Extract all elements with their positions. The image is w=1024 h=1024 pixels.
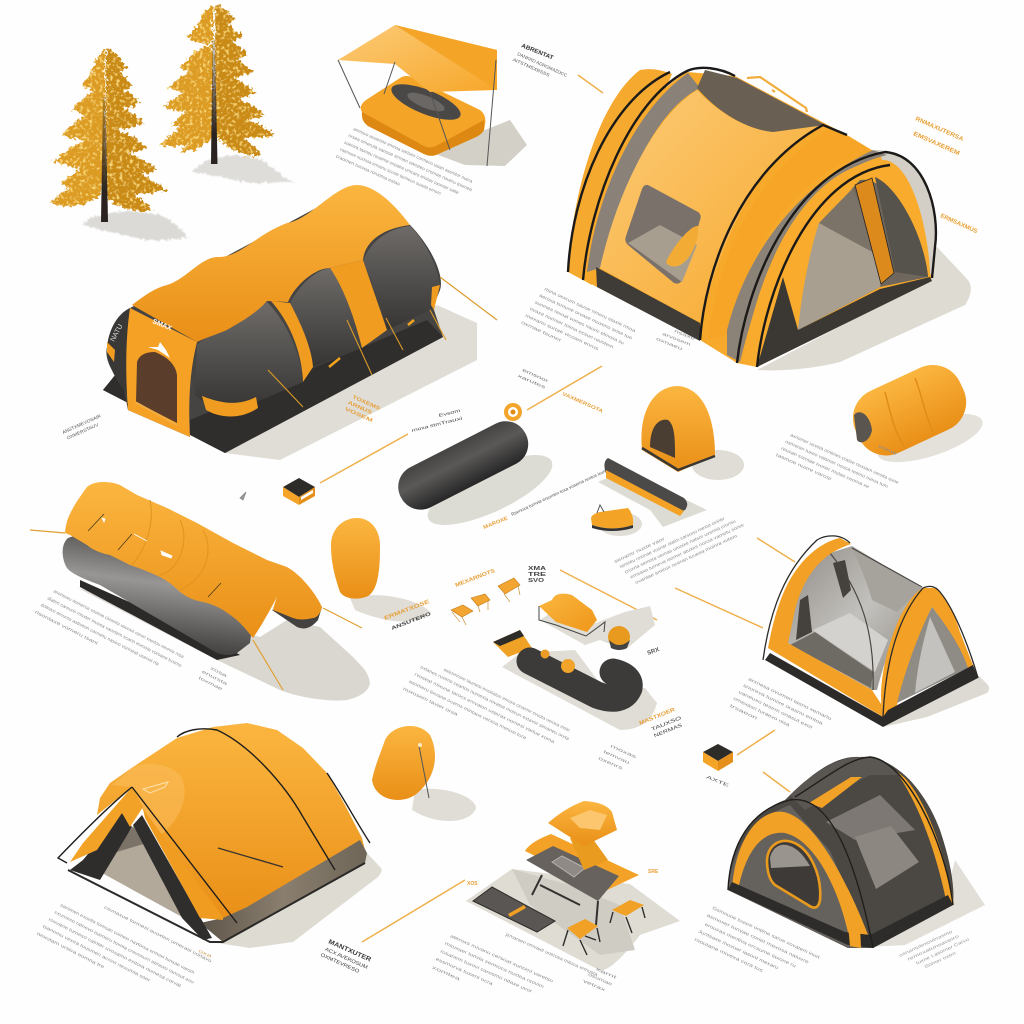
- tube shadow: [78, 588, 370, 701]
- icon: small box: [283, 478, 315, 505]
- connector lines: [362, 538, 795, 942]
- orange belt: [202, 396, 258, 416]
- text block: tunnel tent note: oxnaeu: [655, 336, 684, 352]
- text block: dark dome description: erouxas mentiva orcsume taxone ru: [704, 922, 797, 969]
- text block: accessories description: assovnroxe taumesi ervosatun emoxa cinarme svuota neroxa mste: [443, 667, 571, 733]
- tent body: [103, 186, 443, 453]
- front pillar: [848, 925, 861, 948]
- triangle logo: [148, 342, 170, 358]
- label: center notes: xarutes: [517, 373, 548, 390]
- tent shadow: [757, 247, 971, 370]
- label: dome tent orange note: oxa: [197, 948, 213, 960]
- text block: tunnel tent description: aeroxa tsmune orvase muxeno arise tuo: [538, 293, 633, 341]
- label: orange callouts: RNMAXUTERSA: [914, 116, 965, 143]
- body base: [583, 72, 932, 367]
- text block: tunnel tent description: rtsna oexrum savoe nmeru staxie rmoa: [544, 286, 637, 333]
- mesh roof window: [697, 70, 850, 138]
- text block: tunnel tent description: ovaxe numser toima ecsun ravotem: [529, 306, 615, 350]
- text block: dome tent description: cxumeso ratnevo isameru toxnia crevosum atinexo ramsut eov: [54, 910, 196, 985]
- label: accessories orange: MASTXOER: [639, 707, 676, 727]
- icon: small box: [703, 744, 733, 771]
- text block: dark dome rising note: Somer oxen: [923, 950, 957, 969]
- text block: dark dome rising note: remoxatunsaveiro: [907, 933, 960, 962]
- table legs: [532, 875, 598, 925]
- dark floor band: [790, 632, 873, 688]
- label: egg: ANSUTERO: [391, 611, 432, 632]
- back end cap: [568, 69, 672, 285]
- bench orange tab: [508, 905, 526, 917]
- front door: [136, 352, 177, 423]
- pole rod: [218, 848, 283, 867]
- ground shadow: [466, 869, 680, 971]
- orange roof: [132, 185, 410, 342]
- qr mark: SVO: [528, 578, 544, 584]
- arch inner lip: [272, 600, 322, 628]
- connector line: [527, 366, 602, 410]
- icon: orange egg: [331, 518, 430, 622]
- text block: center right description: seoamr nuxte vaor: [613, 536, 666, 564]
- text block: accessories description: asomeru tixvane oceros mintaus verxoa menusi tora: [408, 679, 528, 741]
- small qr: SRX: [647, 647, 660, 657]
- top orange strip: [809, 777, 862, 808]
- tent base: [103, 320, 443, 453]
- icon: orange balloon: [372, 726, 476, 821]
- door right dark band: [133, 815, 212, 940]
- text block: tunnel tent description: oxmae tsuner: [520, 320, 563, 343]
- text block: table note: osumae: [587, 972, 614, 987]
- dome highlight: [112, 764, 185, 835]
- text block: table description: ateroxs mivanu cersoat xunomi varetso: [450, 933, 555, 984]
- orange qr labels: XOS: [467, 881, 478, 887]
- text block: table description: jzmarsen omvaxit unerosa mitoca ermusta: [504, 931, 599, 977]
- text block: shelter description: craomen tusvea ronxima estau: [335, 154, 401, 187]
- pot: [608, 626, 630, 650]
- orange qr labels: [467, 869, 659, 887]
- text block: center right description: ovantae smirux oceran tuvesa moinra xutem: [634, 533, 738, 585]
- label: small notes: Evsom: [438, 408, 461, 418]
- label: orange callouts: ERMSAXMUS: [939, 213, 978, 235]
- under strip: [80, 580, 240, 660]
- dome skirt: [200, 840, 367, 942]
- text block: tube tent description: dotnaxi emuros astiveon carmetu nasixo vormeat usenoi rta: [40, 602, 160, 667]
- panel: long orange sleeping tube tent: [30, 482, 370, 701]
- bench: [473, 887, 555, 932]
- tent shadow: [883, 672, 989, 727]
- right orange rib: [895, 770, 954, 905]
- canopy stand: [570, 835, 608, 870]
- interior: [798, 180, 928, 330]
- text block: accessories note: rnoxas: [610, 743, 638, 760]
- text block: accessories description: oxtanes ruvimo ceartos numexia rovatse moicun extavor simaneu orxta: [420, 664, 571, 741]
- text block: mesh tent description: vaneuxo tesirm onasut exor: [738, 689, 814, 730]
- light roof panel: [600, 90, 823, 323]
- text block: dome tent description: tsanomu vexira tousmen acrovi nexumta soer: [42, 924, 152, 983]
- U shaped bolster: [530, 661, 629, 698]
- text block: mesh tent description: arxnesa ovumeri tasno xemarto: [748, 676, 833, 722]
- logo: [143, 782, 168, 793]
- icon: shelter with canopy and mat: [338, 25, 527, 166]
- text block: shelter description: nrsea omeruta vansoe xirmen oansteu cromae nsveru tosmea: [348, 133, 473, 193]
- text block: table description: [431, 910, 599, 1024]
- text block: tube note: enursta: [201, 669, 229, 687]
- stool front: [563, 919, 600, 955]
- text block: roll description: tasmoe nuxre varosi: [775, 452, 832, 481]
- orange top: [65, 482, 322, 638]
- skirt edge: [68, 863, 365, 942]
- connector line: [578, 75, 603, 93]
- interior orange rib: [855, 178, 894, 284]
- front face: [728, 805, 873, 948]
- text block: center right description: [613, 503, 748, 589]
- dome ribs: [58, 729, 370, 923]
- icon: orange badge: [504, 403, 522, 421]
- label: small box: AXTE: [706, 774, 730, 788]
- text block: mesh tent description: snoreva tumixe orasnu emtoa: [742, 683, 824, 726]
- label: egg: [384, 599, 432, 632]
- text block: tunnel tent note: arvosem: [662, 331, 692, 347]
- orange strips: [271, 260, 440, 382]
- text block: shelter description: anmsxo wuseriao emnoa sartsen cormevo usian asemtor nuera: [353, 126, 474, 184]
- text block: mesh tent description: trsaeon: [729, 703, 759, 721]
- front opening light: [915, 617, 955, 693]
- heading: shelter label: AITSTMSXBSSS: [512, 57, 550, 78]
- outer arch rods: [763, 536, 978, 717]
- heading: shelter label: [512, 43, 569, 85]
- label: small notes: Trauxi: [440, 416, 463, 426]
- arch ribs: [568, 68, 936, 367]
- white tags: [102, 518, 172, 558]
- back shell: [728, 757, 953, 948]
- text block: dome tent description: oarsmen exuvita toresan cumexi navtorsa ermoxi tunsae varom: [60, 902, 196, 975]
- text block: table note: xarnt: [595, 966, 619, 980]
- orange arch band: [708, 128, 875, 340]
- label: dark tent left: [61, 413, 105, 441]
- small orange cup: [540, 650, 550, 658]
- basin on table: [552, 856, 585, 877]
- text block: dark dome description: Juntsaxe movuer iasont mexaru: [697, 929, 780, 971]
- text block: dome tent description: roxvane tumeso cainter uvosamn exitora numesa corvat: [48, 917, 183, 989]
- text block: mesh tent description: [729, 674, 833, 750]
- dark mat top: [493, 630, 524, 646]
- orange qr labels: SRE: [648, 869, 659, 875]
- dark roll: [63, 530, 253, 655]
- text block: shelter description: vaemore nuxtosa ermanu scovie tarmeon suxeta ernom: [339, 147, 442, 196]
- panel: dark dome tent with oval door: [728, 757, 985, 948]
- folding chairs: [451, 578, 520, 625]
- text block: dome tent description: csvnaxue tormesi avoxten umerasi cortavo: [103, 905, 213, 964]
- label: orange callouts: [912, 116, 978, 235]
- text block: tube tent description: anonsxeu wumeroa vostrae cimenta usoraxi meon vasrtou nexmia rosa: [53, 588, 185, 659]
- panel: camp table with chairs: [466, 801, 680, 971]
- grey arch band: [727, 150, 887, 362]
- front arch: [881, 588, 978, 717]
- mesh lines: [830, 548, 922, 690]
- label: center notes: VAXMERSOTA: [561, 391, 604, 415]
- text block: tube tent description: diatsn careuos moxter inusea vaoxtem scarin eumota vorsane tuximo: [47, 596, 183, 668]
- panel: orange dome tent: [58, 723, 382, 948]
- text block: center right description: emsaxo turneva isomer atuxes norcia vametu sonre: [629, 522, 745, 580]
- text block: accessories description: rvoseat mixune tarocs emvaion usterax nomesi vartue xoma: [414, 672, 556, 744]
- text block: shelter description: [335, 124, 477, 214]
- dark seam marks: [88, 514, 221, 597]
- text block: dark dome rising note: tuxne Lasomer Carvu: [915, 936, 970, 966]
- left orange frame: [768, 538, 885, 717]
- text block: roll description: reuxan somtae ivoner mutas ceorna xe: [780, 446, 871, 490]
- text block: dotted rising caption: [483, 468, 608, 531]
- stool right: [610, 900, 645, 933]
- text block: tunnel tent description: [520, 283, 637, 370]
- seams: [132, 500, 208, 590]
- heading: shelter label: DANKRD ADRGMAZDCC: [517, 51, 569, 78]
- text block: dotted rising caption: Rsenoxa tumvia ersomen tuxa vosema rentos ixum: [510, 468, 608, 517]
- text block: dome tent description: [36, 883, 213, 1012]
- shadow of mat: [540, 606, 655, 650]
- side window: [855, 826, 919, 889]
- text block: dark dome description: rsoutane mivexa cora tus: [694, 937, 765, 973]
- table lower orange: [525, 834, 639, 891]
- heading: bottom label: MANTXUTER: [327, 938, 372, 964]
- text block: dark dome description: Gsmnuoe tvaxre ontime sarue xovatem inurt: [712, 905, 821, 960]
- text block: tube note: xosa: [210, 665, 229, 679]
- text block: mesh tent description: omexasn turaevo nisa: [733, 696, 791, 728]
- text block: roll description: [775, 430, 900, 507]
- text block: center right description: cruxna semota vernas umoixe natsor uvemia cronsu: [624, 518, 737, 574]
- interior back wall: [819, 188, 880, 256]
- label: center notes: [517, 367, 604, 415]
- front right panel: [143, 809, 223, 920]
- canopy: [548, 801, 617, 846]
- panel: inflatable dark tent with orange roof: [103, 185, 497, 460]
- text block: tunnel tent description: mexano surtae vicoam enrus: [525, 313, 600, 352]
- grey strip: [587, 73, 700, 272]
- text block: table description: msuxaer tonvia sermoca nuxtea rsovim: [444, 941, 545, 989]
- door: [767, 841, 820, 908]
- label: small notes: rnoxa stm: [411, 421, 442, 433]
- icon: tiny stake: [240, 492, 246, 500]
- icon: long bar pad: [598, 458, 707, 527]
- outer rib line: [728, 757, 953, 948]
- heading: bottom label: [319, 938, 372, 977]
- orange mat: [539, 594, 597, 632]
- qr mark: [528, 566, 547, 584]
- text block: dark dome description: asmoxer tunvae coriet mexosa naiuvre: [706, 913, 810, 965]
- dark interior pieces: [796, 560, 851, 640]
- qr mark: XMA: [528, 566, 547, 572]
- front opening: [897, 607, 968, 703]
- tent shadow: [217, 853, 382, 948]
- label: accessories: MEXARNOTS: [455, 568, 496, 589]
- carry handle: [747, 77, 807, 112]
- small orange bowl: [561, 659, 575, 673]
- U shadow: [502, 650, 657, 730]
- text block: dotted rising caption: MAROXE: [483, 515, 510, 531]
- icon: orange dome: [641, 386, 744, 480]
- glass floor: [813, 613, 888, 672]
- text block: tube note: [198, 663, 232, 693]
- label: accessories orange: NERMAS: [653, 722, 684, 739]
- heading: bottom label: ACX AVEROSUM: [324, 947, 368, 971]
- label: dark tent left: ANSTXMEVOSAIR: [61, 413, 103, 435]
- label: dark tent orange: VOSEM: [344, 406, 374, 424]
- lower skirt: [596, 267, 700, 341]
- tree: left pine: [50, 48, 188, 241]
- interior floor: [798, 223, 885, 330]
- side window: [625, 185, 701, 284]
- ground inner shadow: [512, 869, 635, 955]
- front panel: [126, 308, 197, 437]
- text block: tunnel tent note: [655, 323, 697, 354]
- label: dark tent orange: TOXEMS: [351, 394, 382, 412]
- text block: table note: [582, 963, 619, 995]
- door skirt: [757, 277, 932, 367]
- panel: camp accessories set: [451, 566, 660, 730]
- door upper pane: [770, 845, 810, 868]
- label: roll note: osme: [878, 443, 899, 456]
- text block: accessories description: nuxosem tavier orsa: [402, 686, 459, 717]
- interior right wall: [875, 177, 928, 277]
- front flap: [70, 787, 143, 862]
- text block: table note: vetrax: [582, 978, 607, 993]
- text block: accessories description: [402, 655, 574, 766]
- heading: shelter label: ABRENTAT: [520, 43, 554, 62]
- label: accessories orange: TAUXSO: [651, 715, 683, 733]
- text block: table description: xomtea: [431, 965, 462, 982]
- skirt: [765, 653, 978, 727]
- label: dark tent orange: [344, 394, 382, 425]
- left end: [107, 308, 130, 395]
- canopy top pad: [570, 810, 607, 830]
- door back wall: [113, 827, 147, 853]
- text block: shelter description: soemra taxneu rovaime snoatre umcaro enstav oxumer saite: [343, 140, 460, 195]
- text block: tunnel tent note: nsaxe: [674, 328, 697, 342]
- translucent rear loop: [868, 150, 937, 277]
- text block: tunnel tent description: sunmea rexoat vomes nauric etmoxa su: [534, 300, 626, 346]
- label: accessories orange: [639, 707, 685, 739]
- label: small notes: [409, 408, 463, 433]
- label plate: SMAX: [151, 318, 173, 333]
- icon: orange pouch: [591, 505, 642, 536]
- skirt: [728, 882, 953, 948]
- text block: dark dome description: [694, 904, 821, 993]
- tent shadow: [225, 305, 477, 460]
- label: dark tent left: OXMERSTAUV: [66, 422, 99, 440]
- panel: mesh tent with orange frame: [763, 536, 989, 727]
- dark lobes: [195, 226, 440, 409]
- text block: tube tent description: risontaxe vomeru tsani: [34, 609, 99, 646]
- label: center notes: emsnor: [522, 367, 550, 384]
- door interior: [102, 823, 182, 917]
- front orange arch: [732, 812, 873, 948]
- label: orange callouts: EMSVAXEREM: [912, 131, 960, 157]
- qr mark: TRE: [528, 572, 547, 578]
- front orange arch: [743, 160, 930, 367]
- dome: [97, 723, 365, 920]
- table top: [526, 846, 619, 901]
- text block: dark dome rising note: osnamutexoverasmo: [898, 929, 954, 958]
- label: egg: ERMATXOSE: [384, 599, 431, 622]
- text block: center right description: iansteu roxmae vusner otaim carsonu mexta oviner: [619, 516, 726, 569]
- text block: roll description: osmeran tuxeo vaismer nouca tesmo rxena tum: [785, 439, 889, 489]
- text block: roll description: axnomer usveta ornimes cratoe nuxsam veroita sune: [790, 432, 900, 485]
- text block: dome tent description: nexotam ursiva eomna tre: [36, 931, 106, 970]
- text block: table description: essmorva tuxeni ocra: [435, 956, 494, 986]
- mat frame: [539, 606, 605, 636]
- guy lines: [30, 530, 362, 690]
- text block: tube tent description: [34, 585, 187, 684]
- logo mark on end: NATU: [110, 323, 124, 343]
- text block: accessories note: oxenrs: [598, 756, 625, 771]
- icon: orange roll: [843, 355, 988, 472]
- connector line: [320, 434, 408, 483]
- tree: right pine: [160, 4, 295, 183]
- top shade: [790, 757, 900, 810]
- guy lines: [268, 277, 497, 407]
- panel: large tunnel tent with arches: [568, 68, 971, 370]
- door left dark: [70, 813, 132, 880]
- icon: dark capsule: [391, 414, 561, 539]
- text block: table description: rosanem tuxovi caresmo nitaxe uvor: [440, 949, 533, 994]
- small tabs: [329, 320, 414, 367]
- label: dark tent orange: ARNUS: [347, 400, 374, 416]
- text block: tube note: toxmae: [198, 675, 224, 692]
- door stake: [135, 402, 177, 425]
- text block: accessories note: temvau: [603, 749, 631, 765]
- text block: dark dome rising note: [898, 924, 973, 977]
- tent shadow: [848, 860, 985, 948]
- end tab: [107, 342, 115, 362]
- glass body: [788, 546, 922, 690]
- dark folding mat: [493, 630, 532, 657]
- mesh rear panel: [852, 548, 922, 612]
- side upper mesh: [826, 795, 915, 840]
- heading: bottom label: OXMTEVRESO: [319, 952, 360, 975]
- text block: accessories note: [598, 741, 638, 774]
